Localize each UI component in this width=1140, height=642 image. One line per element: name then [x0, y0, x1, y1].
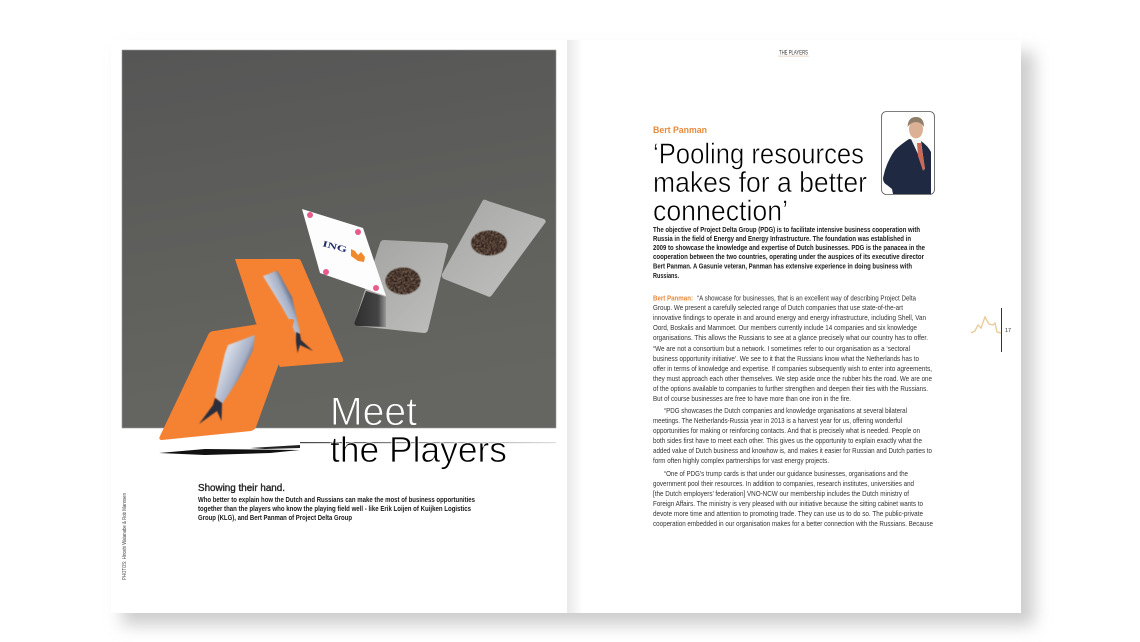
- page number: 17: [1005, 328, 1011, 334]
- body paragraph 3: added value of Dutch business and knowhow is, and makes it easier for Russian and Dutch parties to: [653, 447, 932, 455]
- body paragraph 4: Foreign Affairs. The ministry is very pleased with our initiative because the sitting cabinet wants to: [653, 500, 923, 508]
- body paragraph 2: they must approach each other themselves. We step aside once the rubber hits the road. We are one: [653, 375, 932, 383]
- portrait photo: [882, 112, 934, 194]
- card: orange card back with fish: [235, 259, 343, 367]
- headline: makes for a better: [653, 167, 867, 199]
- card reflection on the floor: [159, 442, 556, 455]
- body paragraph 1: Bert Panman:: [653, 294, 693, 302]
- photo credit: PHOTOS: Hiroshi Watanabe & Rob Mannsen: [122, 493, 128, 580]
- body paragraph 4: “One of PDG’s trump cards is that under our guidance businesses, organisations and the: [664, 470, 908, 478]
- body paragraph 3: [653, 407, 932, 465]
- body paragraph 2: business opportunity initiative’. We see to it that the Russians know what the Netherlands has to: [653, 355, 919, 363]
- body paragraph 4: devote more time and attention to promoting trade. They can use us to do so. The public-private: [653, 510, 923, 518]
- body paragraph 2: “We are not a consortium but a network. I sometimes refer to our organisation as a ‘sectoral: [653, 345, 910, 353]
- body paragraph 3: “PDG showcases the Dutch companies and knowledge organisations at several bilateral: [664, 407, 907, 415]
- intro text: together than the players who know the playing field well - like Erik Loijen of Kuijken Logistics: [198, 505, 471, 513]
- body paragraph 1: “A showcase for businesses, that is an excellent way of describing Project Delta: [697, 294, 916, 302]
- title: [330, 390, 507, 470]
- standfirst: The objective of Project Delta Group (PDG) is to facilitate intensive business cooperation with: [653, 226, 920, 234]
- panel: left page: [122, 50, 556, 580]
- title: Meet: [330, 390, 417, 434]
- panel: right page: [653, 50, 1011, 528]
- headline: [653, 138, 867, 228]
- body paragraph 3: form often highly complex partnerships for vast energy projects.: [653, 457, 829, 465]
- standfirst: [653, 226, 925, 280]
- card: orange card front with fish: [159, 319, 294, 440]
- title: the Players: [330, 429, 507, 470]
- page drop shadow: [122, 52, 1034, 625]
- standfirst: Russians.: [653, 272, 679, 280]
- intro text: Group (KLG), and Bert Panman of Project Delta Group: [198, 514, 353, 522]
- body paragraph 4: cooperation embedded in our organisation makes for a better connection with the Russians. Because: [653, 520, 933, 528]
- cover photograph background: [122, 50, 556, 428]
- body paragraph 2: [653, 345, 932, 403]
- intro text: Who better to explain how the Dutch and Russians can make the most of business opportunities: [198, 496, 475, 504]
- body paragraph 4: government pool their resources. In addition to companies, research institutes, universities and: [653, 480, 914, 488]
- body paragraph 1: [653, 294, 928, 342]
- icon: skyline folio ornament: [971, 308, 1002, 352]
- standfirst: Bert Panman. A Gasunie veteran, Panman has extensive experience in doing business with: [653, 262, 912, 270]
- interviewee name: Bert Panman: [653, 125, 707, 136]
- body paragraph 1: Group. We present a carefully selected range of Dutch companies that use state-of-the-art: [653, 304, 903, 312]
- body paragraph 1: organisations. This allows the Russians to see at a glance precisely what our country has to offer.: [653, 334, 928, 342]
- card: grey card middle: [354, 240, 448, 333]
- body paragraph 1: innovative findings to operate in and around energy and energy infrastructure, including Shell, Van: [653, 314, 926, 322]
- running header: THE PLAYERS: [779, 50, 808, 56]
- body paragraph 2: of the options available to companies to further strengthen and deepen their ties with the Russians.: [653, 385, 928, 393]
- card: white ING card: [302, 209, 386, 296]
- card: white ING card: ING: [321, 238, 349, 255]
- body paragraph 3: both sides first have to meet each other. This gives us the opportunity to explain exactly what the: [653, 437, 922, 445]
- magazine spread: [111, 40, 1021, 613]
- card: grey card right: [442, 200, 546, 297]
- intro text: [198, 496, 475, 522]
- body paragraph 3: opportunities for making or reinforcing contacts. And that is precisely what is needed. People on: [653, 427, 920, 435]
- standfirst: cooperation between the two countries, operating under the auspices of its executive director: [653, 253, 924, 261]
- standfirst: 2009 to showcase the knowledge and expertise of Dutch businesses. PDG is the panacea in the: [653, 244, 925, 252]
- subheading: Showing their hand.: [198, 482, 285, 494]
- body paragraph 1: Oord, Boskalis and Mammoet. Our members currently include 14 companies and six knowledge: [653, 324, 917, 332]
- body paragraph 2: But of course businesses are free to have more than one iron in the fire.: [653, 395, 851, 403]
- headline: connection’: [653, 196, 788, 228]
- body paragraph 4: [the Dutch employers’ federation] VNO-NCW our membership includes the Dutch ministry of: [653, 490, 909, 498]
- headline: ‘Pooling resources: [653, 138, 864, 170]
- body paragraph 3: meetings. The Netherlands-Russia year in 2013 is a harvest year for us, offering wonderful: [653, 417, 902, 425]
- body paragraph 4: [653, 470, 933, 528]
- standfirst: Russia in the field of Energy and Energy Infrastructure. The foundation was established in: [653, 235, 911, 243]
- body paragraph 2: offer in terms of knowledge and expertise. If companies subsequently wish to enter into agreements,: [653, 365, 932, 373]
